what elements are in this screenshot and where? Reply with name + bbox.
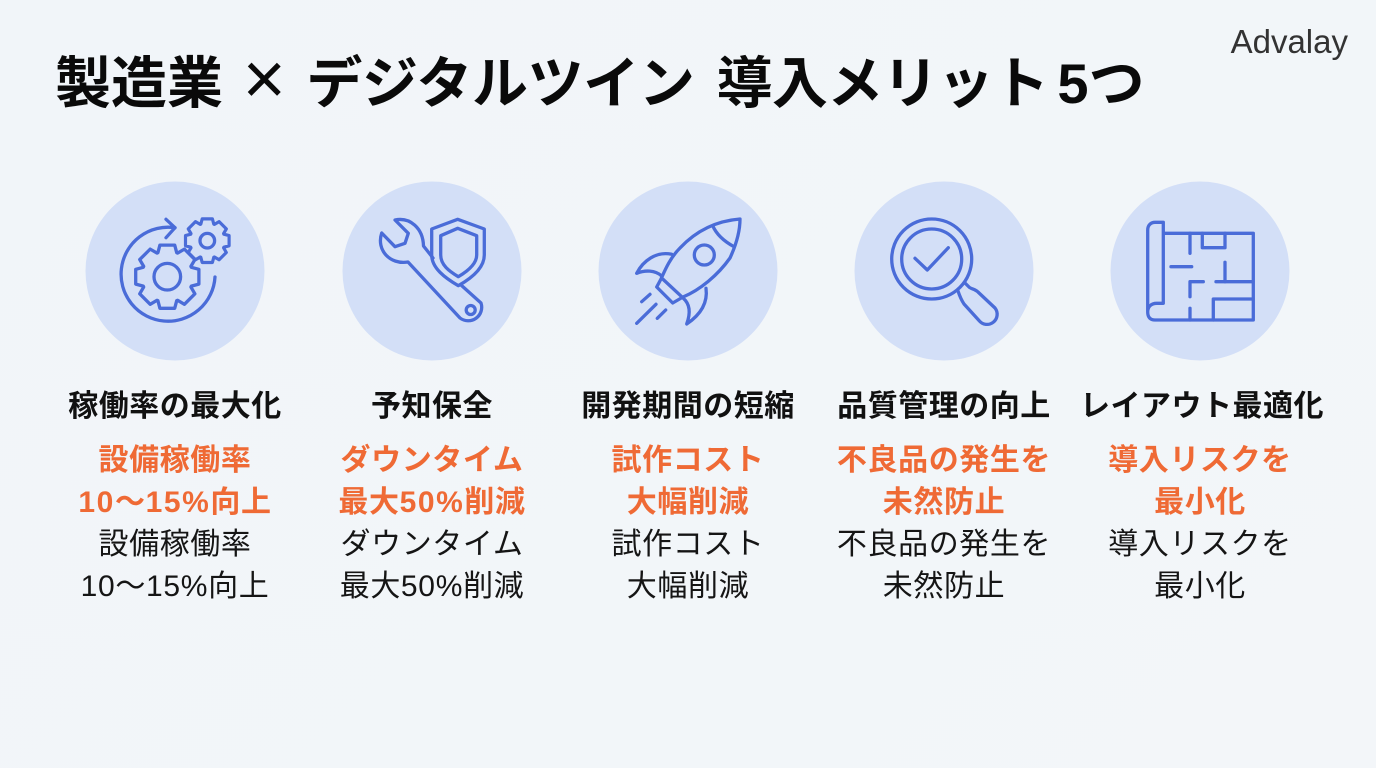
icon: wrench and shield: [342, 182, 522, 360]
heading: 開発期間の短縮: [581, 390, 795, 423]
highlight: [612, 444, 764, 519]
description: [1108, 528, 1292, 603]
logo: Advalay: Advalay: [1231, 23, 1348, 60]
description: 未然防止: [883, 570, 1005, 603]
description: 10～15%向上: [81, 570, 269, 603]
description: 最小化: [1154, 570, 1246, 603]
column: 品質管理の向上: [837, 390, 1051, 603]
column: 開発期間の短縮: [581, 390, 795, 603]
highlight: 未然防止: [883, 486, 1005, 519]
description: [837, 528, 1051, 603]
highlight: 設備稼働率: [98, 444, 252, 477]
highlight: [837, 444, 1051, 519]
description: [612, 528, 764, 603]
description: ダウンタイム: [340, 528, 524, 561]
description: [81, 528, 269, 603]
column: 予知保全: [338, 390, 526, 603]
highlight: 大幅削減: [627, 486, 749, 519]
highlight: 導入リスクを: [1108, 444, 1292, 477]
description: 大幅削減: [627, 570, 749, 603]
heading: 品質管理の向上: [837, 390, 1051, 423]
icon: magnifier with check: [854, 182, 1034, 360]
column: 稼働率の最大化: [68, 390, 282, 603]
highlight: ダウンタイム: [340, 444, 524, 477]
highlight: [338, 444, 526, 519]
description: 試作コスト: [612, 528, 764, 561]
highlight: 最大50%削減: [338, 486, 526, 519]
heading: レイアウト最適化: [1080, 390, 1324, 423]
description: 最大50%削減: [340, 570, 524, 603]
highlight: 10～15%向上: [78, 486, 272, 519]
description: [340, 528, 524, 603]
heading: 稼働率の最大化: [68, 390, 282, 423]
highlight: [78, 444, 272, 519]
highlight: 最小化: [1154, 486, 1246, 519]
description: 導入リスクを: [1108, 528, 1292, 561]
description: 設備稼働率: [98, 528, 252, 561]
icon: gears with circular arrow: [86, 182, 264, 360]
icon: floor plan: [1110, 182, 1290, 360]
description: 不良品の発生を: [837, 528, 1051, 561]
highlight: 試作コスト: [612, 444, 764, 477]
title: 製造業 × デジタルツイン 導入メリット5つ: [55, 37, 1145, 120]
highlight: [1108, 444, 1292, 519]
heading: 予知保全: [371, 390, 493, 423]
column: レイアウト最適化: [1080, 390, 1324, 603]
highlight: 不良品の発生を: [837, 444, 1051, 477]
icon: rocket: [598, 182, 778, 360]
